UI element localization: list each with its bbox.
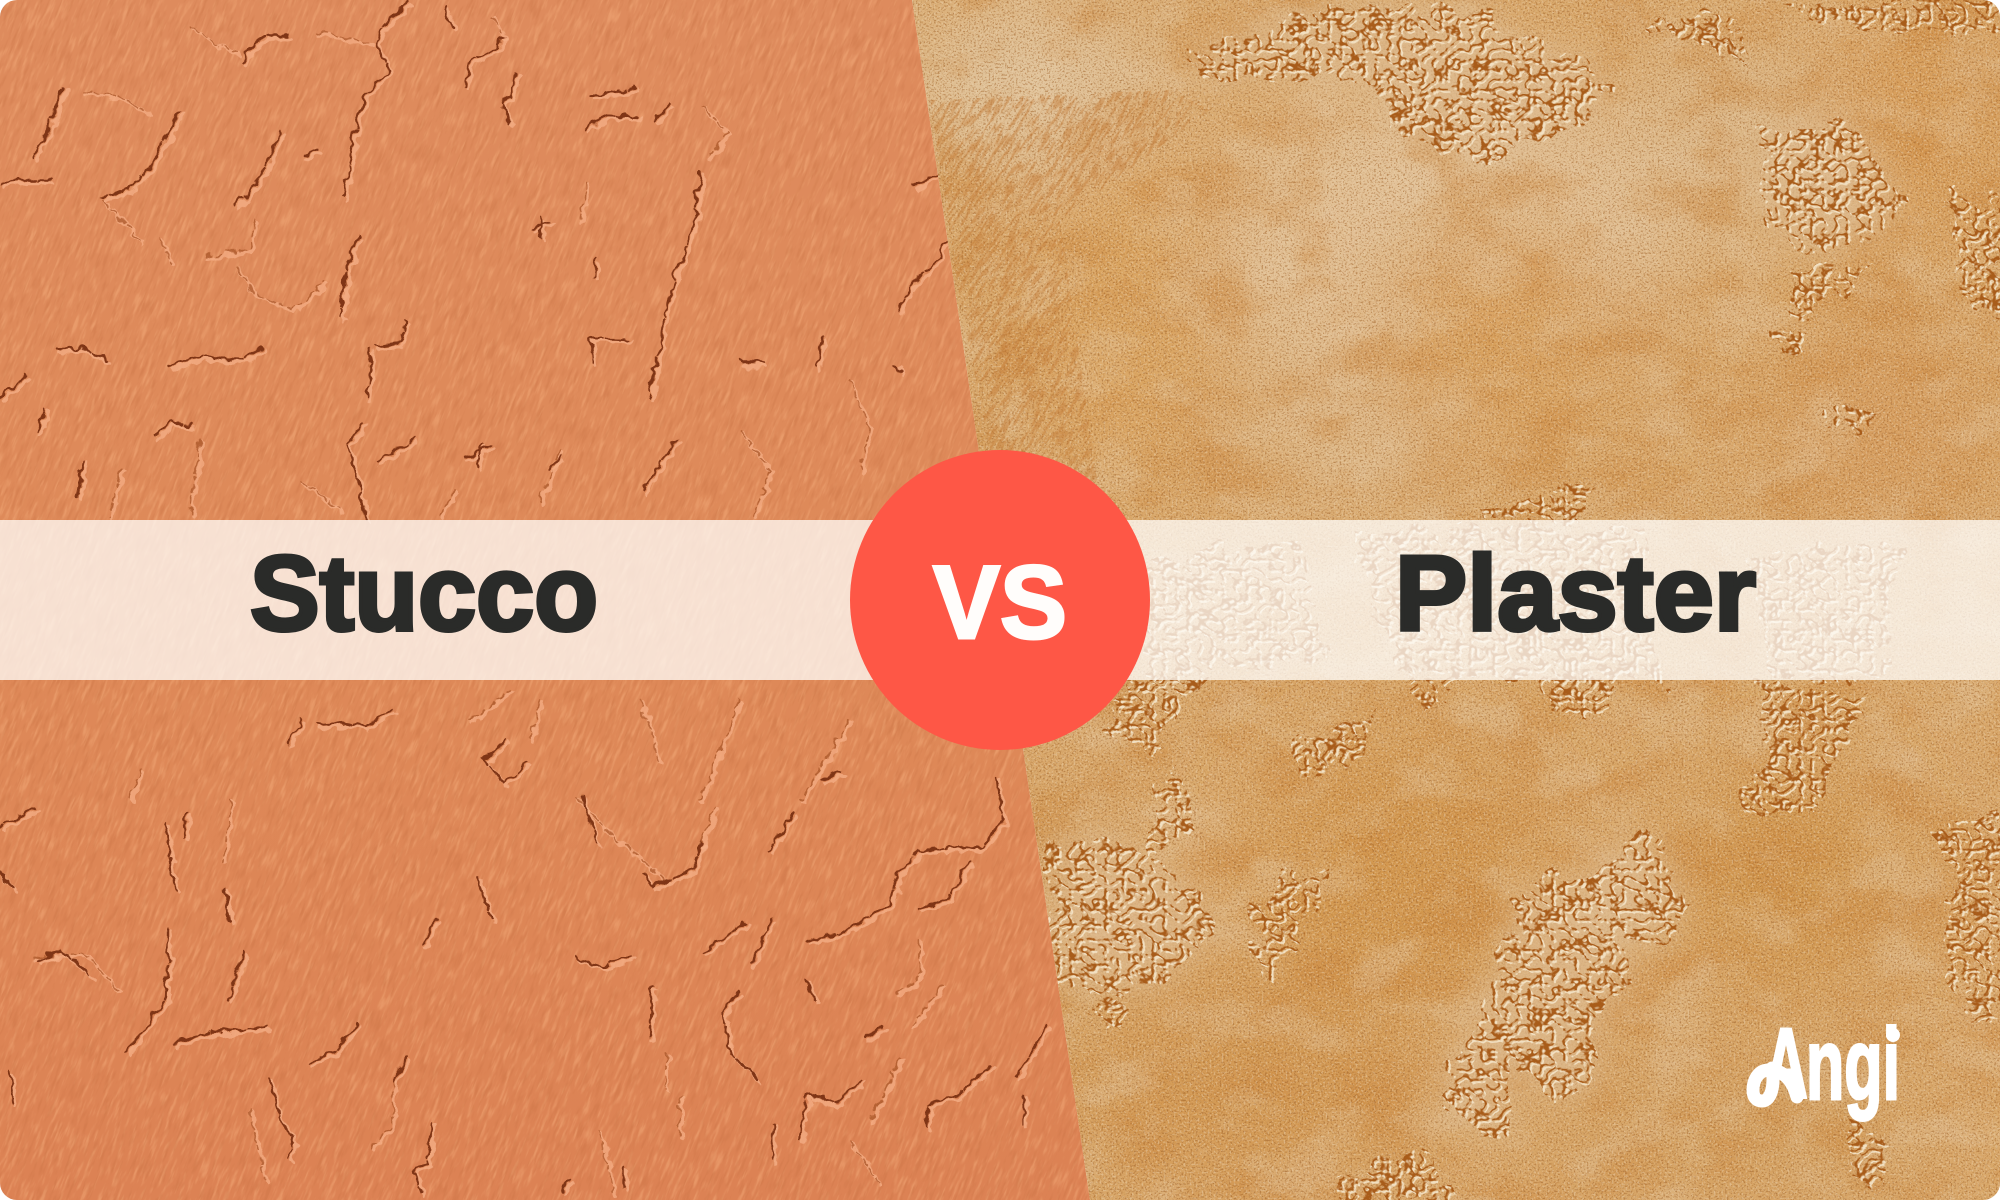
logo: Angi: A	[1764, 1009, 1808, 1121]
plaster brushed hatch area	[930, 90, 1210, 486]
panel: plaster texture	[900, 0, 2000, 1200]
plaster crust patches	[1051, 0, 2000, 1200]
band: left label strip	[0, 520, 874, 680]
heading: Plaster: Plaster	[1395, 533, 1756, 653]
badge: VS circle	[850, 450, 1150, 750]
band: right label strip	[1126, 520, 2000, 680]
logo: Angi	[1753, 1009, 1900, 1121]
badge: VS circle: VS	[933, 545, 1067, 661]
panel: stucco texture	[0, 0, 1100, 1200]
heading: Stucco: Stucco	[250, 533, 598, 653]
logo: Angi: ngi	[1806, 1009, 1900, 1121]
